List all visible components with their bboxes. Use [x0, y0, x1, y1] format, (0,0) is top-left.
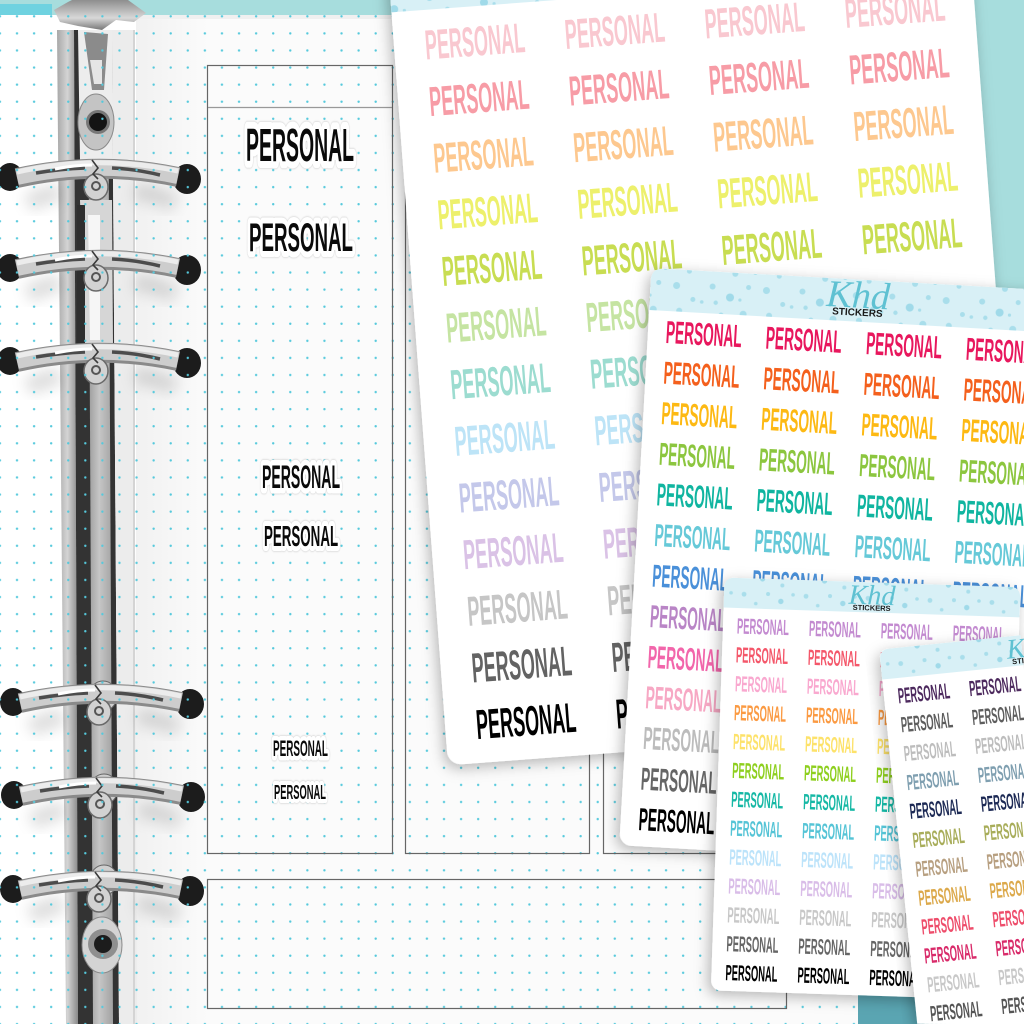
sheet header	[879, 635, 1024, 680]
bright word rows: PERSONAL	[654, 519, 731, 558]
pastel word rows: PERSONAL	[470, 637, 573, 692]
fine-line word rows: PERSONAL	[797, 963, 850, 989]
pastel word rows: PERSONAL	[576, 174, 679, 228]
dark teal desk patch	[855, 985, 925, 1024]
bright word rows: PERSONAL	[852, 571, 929, 610]
sheet header	[388, 0, 972, 12]
pastel word rows: PERSONAL	[453, 411, 556, 465]
top left teal tab	[0, 4, 52, 16]
applied sticker: small bold: PERSONAL	[273, 737, 328, 761]
pastel word rows: PERSONAL	[449, 354, 552, 408]
muted word rows: PERSONAL	[903, 737, 957, 766]
bright word rows: PERSONAL	[858, 449, 936, 488]
bright word rows: PERSONAL	[645, 681, 722, 720]
binder spine silver strip	[57, 30, 78, 1024]
pastel word rows: PERSONAL	[856, 153, 959, 207]
bright word rows: PERSONAL	[649, 600, 727, 639]
fine-line word rows: PERSONAL	[800, 876, 853, 903]
pastel word rows: PERSONAL	[614, 684, 718, 738]
bright word rows: PERSONAL	[854, 530, 932, 569]
panel: muted sticker sheet	[879, 630, 1024, 1024]
muted word rows: PERSONAL	[917, 881, 972, 911]
bright word rows: PERSONAL	[763, 362, 840, 401]
pastel word rows: PERSONAL	[567, 60, 671, 115]
binder middle reflection	[80, 200, 113, 345]
fine-line word rows: PERSONAL	[802, 819, 855, 845]
bright word rows: PERSONAL	[861, 408, 938, 447]
pastel word rows: PERSONAL	[601, 514, 705, 568]
pastel word rows: PERSONAL	[457, 467, 561, 522]
muted word rows: PERSONAL	[906, 766, 960, 795]
pastel word rows: PERSONAL	[712, 107, 815, 161]
pastel word rows: PERSONAL	[436, 184, 539, 238]
muted word rows	[897, 672, 1024, 1024]
pastel word rows: PERSONAL	[589, 344, 692, 398]
muted word rows: PERSONAL	[909, 794, 963, 824]
fine-line word rows: PERSONAL	[728, 874, 781, 900]
fine-line word rows: PERSONAL	[870, 936, 923, 963]
fine-line word rows: PERSONAL	[737, 614, 789, 640]
fine-line word rows: PERSONAL	[807, 674, 859, 701]
pastel word rows: PERSONAL	[466, 581, 569, 635]
applied sticker: medium thin: PERSONAL	[264, 520, 338, 552]
bright word rows: PERSONAL	[642, 722, 720, 761]
panel: bright sticker sheet	[619, 263, 1024, 879]
bright word rows: PERSONAL	[865, 327, 943, 366]
pastel word rows: PERSONAL	[716, 163, 819, 217]
pastel word rows: PERSONAL	[860, 209, 964, 264]
applied sticker: medium bold: PERSONAL	[262, 461, 340, 496]
applied sticker: large thin: PERSONAL	[249, 215, 353, 260]
KHD stickers logo: Khd	[825, 273, 892, 318]
pastel word rows	[423, 0, 998, 748]
sheet header	[649, 268, 1024, 344]
pastel word rows: PERSONAL	[707, 50, 811, 104]
ruled planner boxes	[208, 66, 786, 1008]
pastel word rows: PERSONAL	[597, 457, 701, 511]
sheet header	[724, 578, 1020, 617]
bright word rows: PERSONAL	[640, 762, 718, 802]
pastel word rows: PERSONAL	[606, 570, 709, 624]
fine-line word rows: PERSONAL	[873, 850, 926, 876]
fine-line word rows: PERSONAL	[803, 790, 856, 816]
fine-line word rows: PERSONAL	[880, 648, 932, 674]
bright word rows: PERSONAL	[658, 438, 736, 477]
pastel word rows: PERSONAL	[428, 71, 531, 125]
fine-line word rows: PERSONAL	[872, 879, 925, 905]
pastel word rows: PERSONAL	[852, 96, 955, 150]
bright word rows: PERSONAL	[660, 397, 738, 436]
fine-line word rows: PERSONAL	[877, 734, 929, 761]
binder rings	[0, 160, 205, 916]
pastel word rows: PERSONAL	[580, 230, 683, 285]
fine-line word rows: PERSONAL	[875, 792, 928, 819]
fine-line word rows: PERSONAL	[879, 677, 931, 703]
muted word rows: PERSONAL	[897, 679, 951, 709]
KHD stickers logo: Khd	[847, 580, 897, 612]
fine-line word rows: PERSONAL	[806, 703, 858, 729]
fine-line word rows: PERSONAL	[871, 908, 924, 934]
pastel word rows: PERSONAL	[474, 694, 578, 748]
panel: fine-line sticker sheet	[711, 576, 1021, 1000]
translucent spine strip	[112, 30, 137, 1024]
fine-line word rows: PERSONAL	[869, 965, 922, 992]
fine-line word rows: PERSONAL	[727, 903, 780, 929]
pastel word rows: PERSONAL	[462, 524, 565, 578]
bright word rows: PERSONAL	[856, 489, 934, 529]
bright word rows	[638, 316, 1024, 859]
fine-line word rows: PERSONAL	[805, 732, 858, 758]
bright word rows: PERSONAL	[663, 356, 740, 396]
muted word rows: PERSONAL	[971, 701, 1024, 730]
fine-line word rows: PERSONAL	[878, 705, 930, 732]
muted word rows: PERSONAL	[914, 852, 969, 882]
binder channel dark	[74, 30, 119, 1024]
bright word rows: PERSONAL	[760, 402, 838, 442]
pastel word rows: PERSONAL	[423, 14, 527, 69]
eyelet lower	[82, 917, 122, 973]
fine-line word rows: PERSONAL	[804, 761, 857, 787]
pastel word rows: PERSONAL	[440, 241, 544, 295]
post studs lower	[89, 681, 118, 895]
fine-line word rows: PERSONAL	[734, 701, 787, 727]
pastel word rows: PERSONAL	[584, 287, 688, 341]
pastel word rows: PERSONAL	[563, 4, 666, 58]
muted word rows: PERSONAL	[920, 910, 975, 940]
pastel word rows: PERSONAL	[593, 400, 696, 454]
muted word rows: PERSONAL	[968, 672, 1022, 701]
pastel word rows: PERSONAL	[432, 128, 535, 182]
muted word rows: PERSONAL	[911, 823, 966, 853]
pastel word rows: PERSONAL	[572, 117, 675, 171]
binder channel bright	[88, 30, 113, 1024]
bright word rows: PERSONAL	[758, 443, 836, 482]
fine-line word rows: PERSONAL	[730, 816, 783, 843]
fine-line word rows: PERSONAL	[799, 905, 852, 932]
bright word rows: PERSONAL	[638, 803, 716, 842]
fine-line word rows: PERSONAL	[731, 787, 784, 814]
top hinge	[54, 0, 146, 30]
fine-line word rows: PERSONAL	[729, 845, 782, 871]
applied sticker: large bold: PERSONAL	[246, 121, 354, 171]
fine-line word rows: PERSONAL	[735, 672, 787, 698]
fine-line word rows: PERSONAL	[733, 730, 786, 756]
fine-line word rows: PERSONAL	[808, 645, 860, 672]
applied sticker: small thin: PERSONAL	[274, 782, 326, 804]
bright word rows: PERSONAL	[863, 368, 941, 407]
bright word rows: PERSONAL	[656, 478, 734, 517]
fine-line word rows: PERSONAL	[801, 847, 854, 874]
bright word rows: PERSONAL	[647, 641, 725, 680]
bright word rows: PERSONAL	[751, 565, 829, 604]
bright word rows: PERSONAL	[753, 524, 831, 564]
muted word rows: PERSONAL	[926, 968, 980, 998]
bright word rows: PERSONAL	[651, 559, 729, 599]
fine-line word rows: PERSONAL	[880, 619, 933, 645]
binder mechanism	[0, 0, 205, 1024]
KHD stickers logo: STICKERS	[853, 603, 891, 613]
pastel word rows: PERSONAL	[610, 627, 713, 681]
fine-line word rows: PERSONAL	[736, 643, 788, 669]
muted word rows: PERSONAL	[923, 939, 977, 969]
pastel word rows: PERSONAL	[720, 220, 823, 274]
fine-line word rows	[725, 614, 1005, 994]
pastel word rows: PERSONAL	[848, 39, 951, 94]
fine-line word rows: PERSONAL	[726, 932, 779, 958]
KHD stickers logo: STICKERS	[832, 306, 883, 320]
binder upper reflection	[78, 30, 113, 160]
fine-line word rows: PERSONAL	[725, 961, 778, 987]
panel: pastel sticker sheet	[388, 0, 1024, 765]
bright word rows: PERSONAL	[765, 321, 843, 361]
bright word rows: PERSONAL	[756, 484, 834, 523]
fine-line word rows: PERSONAL	[809, 616, 861, 643]
fine-line word rows: PERSONAL	[874, 821, 927, 847]
fine-line word rows: PERSONAL	[952, 621, 1005, 648]
fine-line word rows: PERSONAL	[732, 758, 785, 785]
eyelet upper	[78, 94, 114, 150]
bright word rows: PERSONAL	[665, 316, 743, 355]
fine-line word rows: PERSONAL	[798, 934, 851, 961]
muted word rows: PERSONAL	[900, 708, 954, 738]
fine-line word rows: PERSONAL	[876, 763, 929, 790]
pastel word rows: PERSONAL	[445, 298, 548, 352]
